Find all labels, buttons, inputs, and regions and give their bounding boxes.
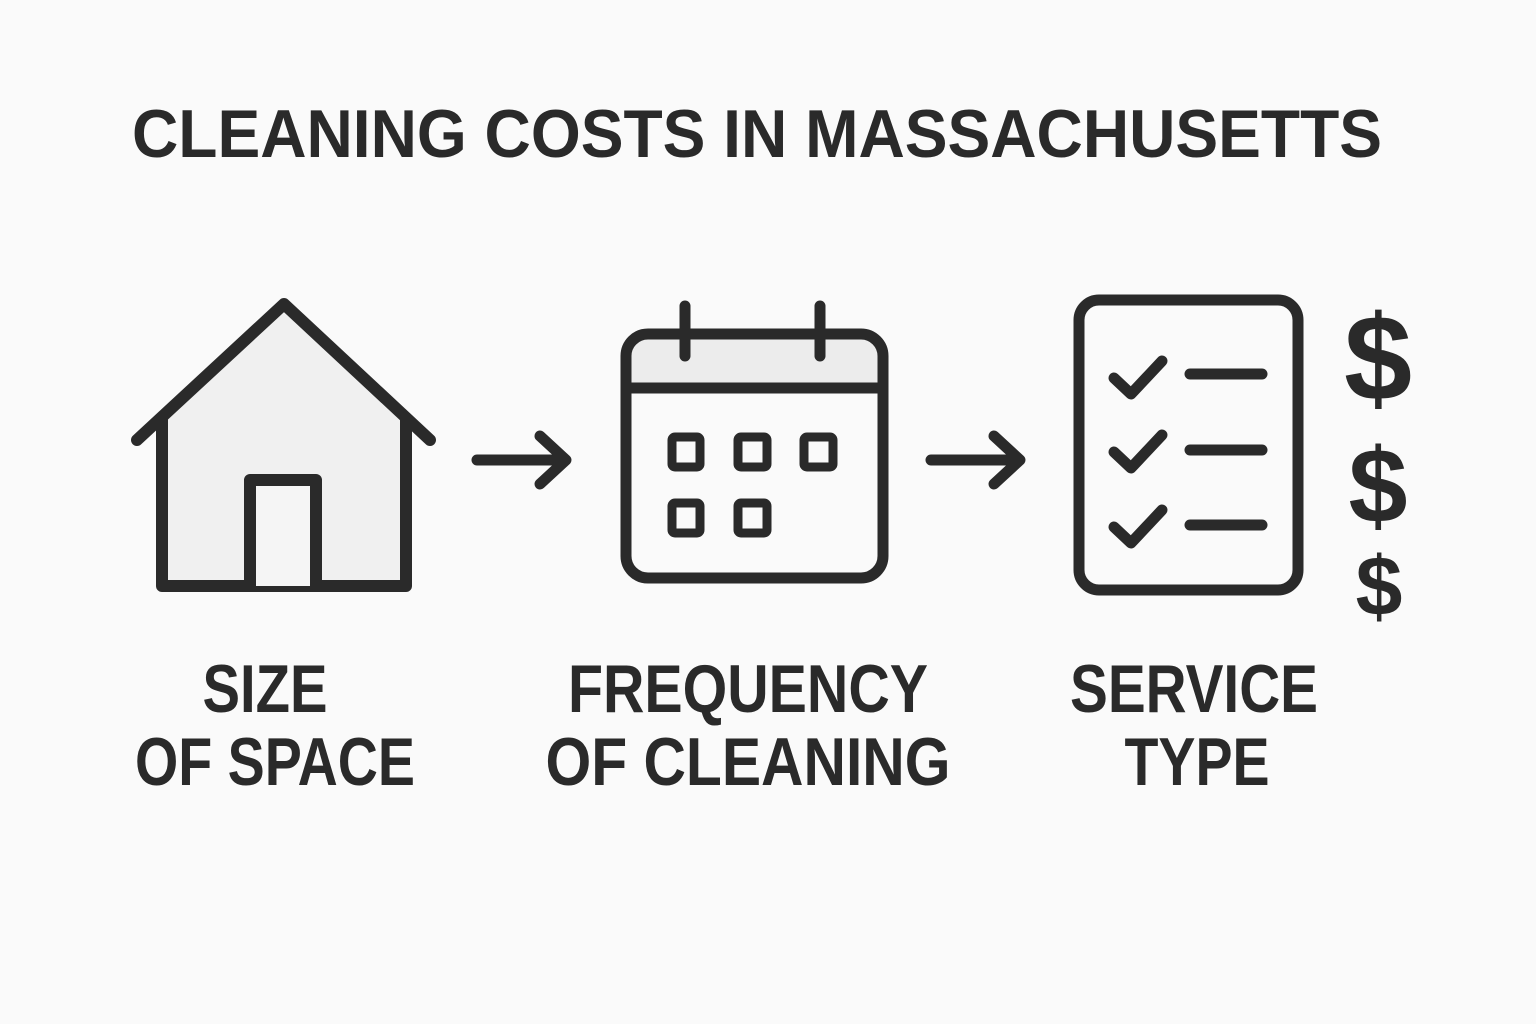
label: service type [1070,651,1318,800]
label: size of space: SIZE [202,651,328,727]
title: CLEANING COSTS IN MASSACHUSETTS [132,96,1382,172]
icon: checklist [1079,300,1298,590]
arrow 1 [477,436,566,484]
label: service type: SERVICE [1070,651,1318,727]
icon: calendar [626,306,883,578]
arrow 2 [931,436,1020,484]
label: frequency of cleaning: FREQUENCY [568,651,928,727]
icon: dollar signs: $ [1344,290,1412,426]
label: frequency of cleaning [546,651,950,800]
label: frequency of cleaning: OF CLEANING [546,724,950,800]
label: size of space [135,651,415,800]
label: service type: TYPE [1124,724,1270,800]
icon: dollar signs: $ [1349,427,1407,545]
icon: house [137,304,430,586]
icon: dollar signs [1344,290,1412,633]
label: size of space: OF SPACE [135,724,415,800]
icon: dollar signs: $ [1356,539,1402,633]
